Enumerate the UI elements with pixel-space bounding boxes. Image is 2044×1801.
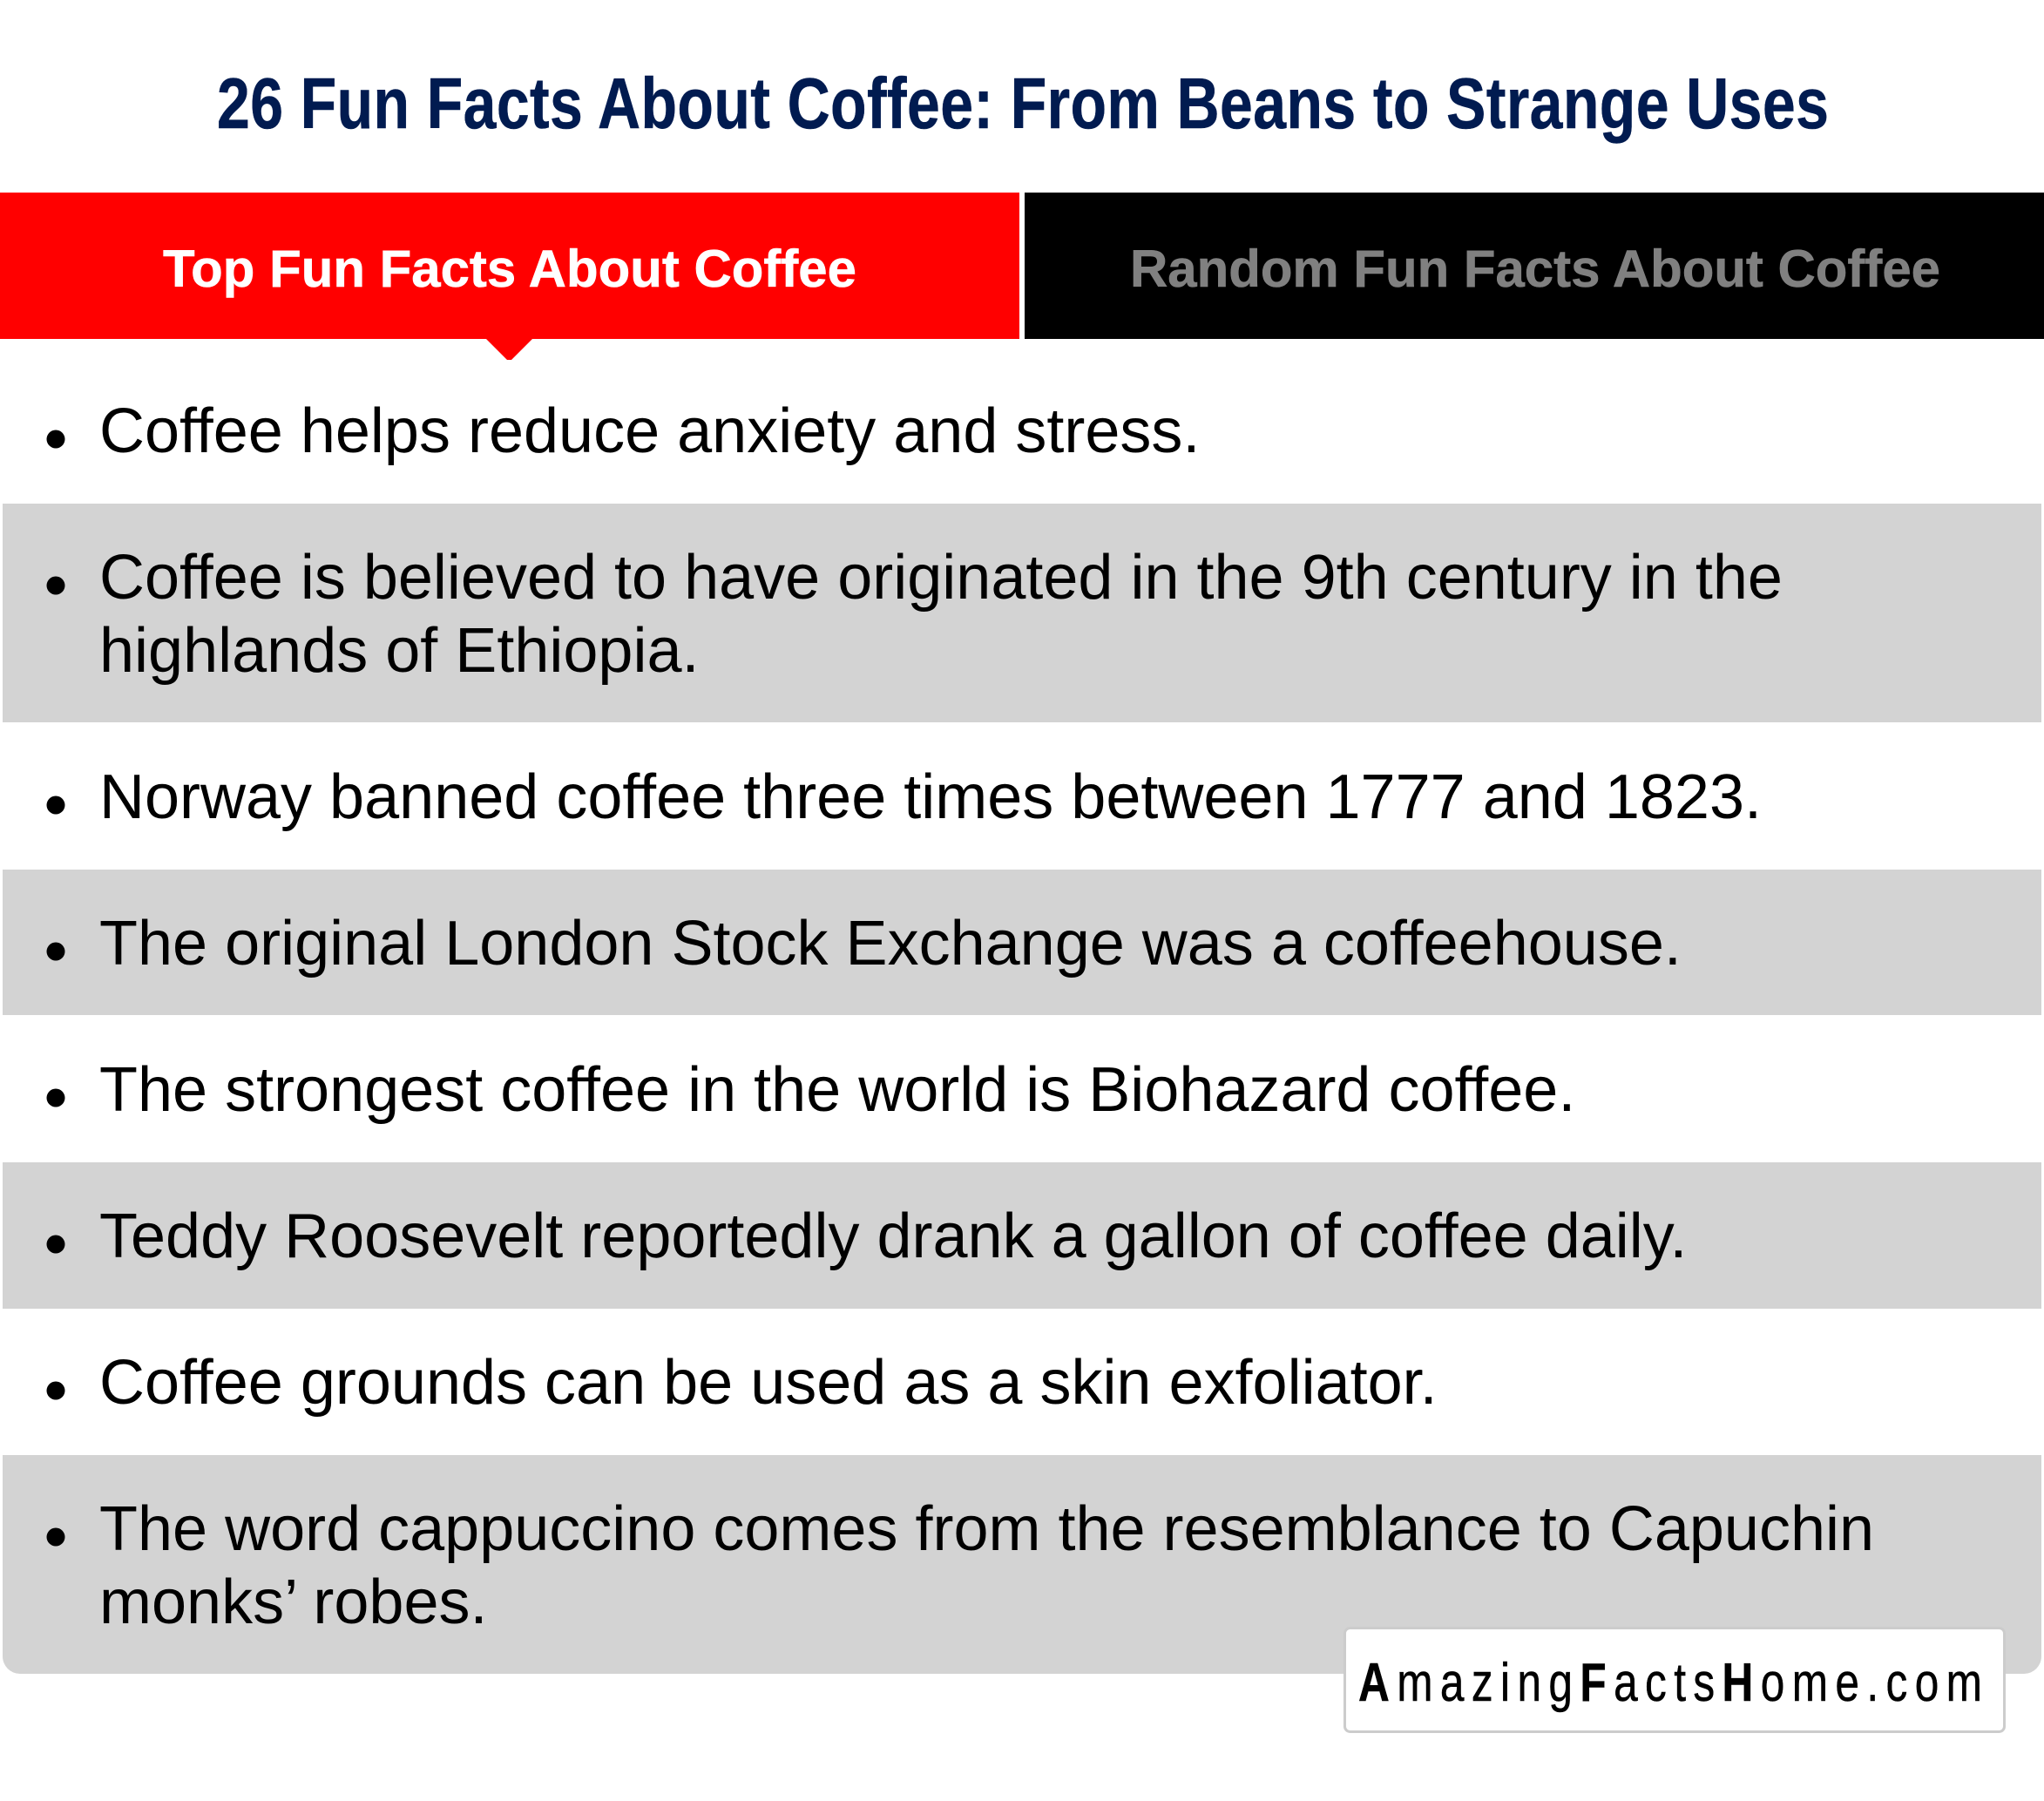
active tab: top fun facts	[0, 193, 1019, 360]
fact 2	[3, 504, 2041, 722]
fact 8: The word cappuccino comes from the resemblance to Capuchin	[99, 1494, 1874, 1564]
fact 5: The strongest coffee in the world is Biohazard coffee.	[99, 1055, 1575, 1125]
fact 4: The original London Stock Exchange was a coffeehouse.	[99, 909, 1682, 978]
active tab: top fun facts: Top Fun Facts About Coffee	[163, 240, 856, 298]
watermark: AmazingFactsHome.com	[1345, 1628, 2004, 1732]
fact 8	[3, 1455, 2041, 1674]
fact 4	[3, 870, 2041, 1015]
fact 8: monks’ robes.	[99, 1567, 488, 1637]
fact 2: Coffee is believed to have originated in the 9th century in the	[99, 543, 1783, 613]
inactive tab: random fun facts: Random Fun Facts About Coffee	[1130, 240, 1940, 298]
watermark: AmazingFactsHome.com: AmazingFactsHome.com	[1358, 1652, 1982, 1712]
fact 7: Coffee grounds can be used as a skin exfoliator.	[99, 1348, 1438, 1418]
fact 3: Norway banned coffee three times between 1777 and 1823.	[99, 762, 1762, 832]
inactive tab: random fun facts	[1025, 193, 2044, 339]
fact 6: Teddy Roosevelt reportedly drank a gallon of coffee daily.	[99, 1202, 1687, 1271]
title: 26 Fun Facts About Coffee: From Beans to Strange Uses	[217, 64, 1829, 145]
fact 6	[3, 1162, 2041, 1309]
fact 2: highlands of Ethiopia.	[99, 616, 699, 686]
fact 1: Coffee helps reduce anxiety and stress.	[99, 396, 1200, 466]
